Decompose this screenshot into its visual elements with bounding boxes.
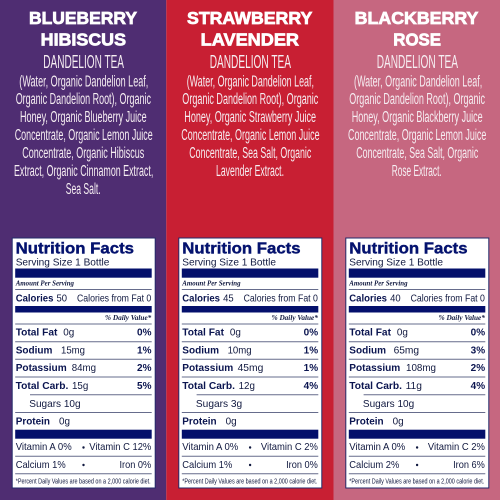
percent daily value label: % Daily Value*: [105, 314, 152, 322]
total fat row: [16, 328, 152, 338]
potassium row: 2%: [137, 363, 152, 374]
ingredients text: [348, 74, 486, 180]
sodium row: 65mg: [394, 346, 419, 356]
calories row: Calories: [182, 294, 220, 304]
protein row: 0g: [226, 416, 237, 428]
total carb row: 4%: [304, 381, 318, 392]
total fat row: Total Fat: [349, 328, 392, 338]
heading: blackberry rose: BLACKBERRY: [355, 8, 479, 28]
total carb row: 5%: [137, 381, 152, 392]
sodium row: [349, 346, 485, 356]
calories row: 45: [223, 294, 234, 304]
ingredients text: Extract, Organic Cinnamon Extract,: [14, 163, 153, 180]
potassium row: 2%: [471, 363, 485, 374]
percent daily value label: % Daily Value*: [272, 314, 318, 322]
sodium row: 1%: [137, 346, 152, 356]
minerals row: Iron 6%: [453, 460, 485, 471]
nutrition title: Nutrition Facts: [349, 241, 468, 258]
minerals row: [182, 460, 318, 471]
serving size: Serving Size 1 Bottle: [349, 258, 443, 268]
ingredients text: [181, 74, 320, 180]
vitamins row: Vitamin C 12%: [89, 442, 151, 453]
total fat row: 0%: [471, 328, 485, 338]
ingredients text: Concentrate, Organic Lemon Juice: [15, 127, 153, 144]
sodium row: [182, 346, 318, 356]
footnote: *Percent Daily Values are based on a 2,000 calorie diet.: [16, 478, 151, 486]
vitamins row: Vitamin C 2%: [428, 442, 485, 453]
ingredients text: Concentrate, Organic Hibiscus: [22, 145, 144, 162]
minerals row: [16, 460, 151, 471]
sodium row: 3%: [471, 346, 485, 356]
subheading: dandelion tea: DANDELION TEA: [43, 51, 124, 72]
panel: blueberry hibiscus: [0, 0, 166, 500]
amount per serving: Amount Per Serving: [348, 280, 408, 288]
calories row: 40: [390, 294, 401, 304]
calories row: Calories from Fat 0: [77, 294, 151, 304]
protein row: Protein: [349, 416, 384, 428]
nutrition facts: strawberry lavender: [179, 238, 322, 488]
ingredients text: Organic Dandelion Root), Organic: [16, 91, 151, 108]
heading: strawberry lavender: STRAWBERRY: [187, 8, 313, 28]
potassium row: 84mg: [72, 363, 96, 374]
total fat row: [349, 328, 485, 338]
ingredients text: Honey, Organic Blueberry Juice: [20, 109, 147, 126]
total carb row: Total Carb.: [16, 381, 69, 392]
potassium row: 45mg: [238, 363, 264, 374]
calories row: [349, 294, 485, 304]
nutrition facts: blackberry rose: [346, 238, 489, 488]
vitamins row: Vitamin C 2%: [261, 442, 318, 453]
nutrition title: Nutrition Facts: [182, 241, 301, 258]
sugars row: Sugars 10g: [363, 399, 414, 410]
potassium row: Potassium: [16, 363, 67, 374]
ingredients text: Organic Dandelion Root), Organic: [182, 91, 318, 108]
percent daily value label: % Daily Value*: [439, 314, 485, 322]
ingredients text: Sea Salt.: [66, 181, 101, 198]
heading: blackberry rose: ROSE: [393, 30, 441, 50]
total fat row: 0%: [304, 328, 318, 338]
minerals row: Calcium 2%: [349, 460, 399, 471]
panel: strawberry lavender: [166, 0, 334, 500]
sodium row: Sodium: [16, 346, 52, 356]
vitamins row: [16, 442, 151, 453]
protein row: Protein: [182, 416, 217, 428]
sodium row: Sodium: [349, 346, 386, 356]
potassium row: [349, 363, 485, 374]
panel: blackberry rose: [334, 0, 500, 500]
sugars row: Sugars 3g: [196, 399, 242, 410]
total carb row: [349, 381, 485, 392]
nutrition title: Nutrition Facts: [16, 241, 134, 258]
nutrition facts: blueberry hibiscus: [12, 238, 155, 488]
total fat row: 0g: [63, 328, 75, 338]
total carb row: Total Carb.: [182, 381, 235, 392]
calories row: Calories: [349, 294, 387, 304]
protein row: Protein: [16, 416, 50, 428]
ingredients text: Lavender Extract.: [216, 163, 284, 180]
total fat row: 0%: [137, 328, 152, 338]
footnote: *Percent Daily Values are based on a 2,000 calorie diet.: [182, 478, 317, 486]
total fat row: 0g: [397, 328, 408, 338]
amount per serving: Amount Per Serving: [15, 280, 74, 288]
calories row: Calories from Fat 0: [244, 294, 318, 304]
minerals row: Calcium 1%: [16, 460, 66, 471]
ingredients text: Rose Extract.: [392, 163, 442, 180]
total carb row: 11g: [406, 381, 422, 392]
calories row: Calories from Fat 0: [411, 294, 485, 304]
total fat row: [182, 328, 318, 338]
potassium row: [182, 363, 318, 374]
vitamins row: Vitamin A 0%: [16, 442, 72, 453]
ingredients text: Concentrate, Sea Salt, Organic: [189, 145, 311, 162]
protein row: 0g: [393, 416, 404, 428]
minerals row: Iron 0%: [120, 460, 151, 471]
heading: strawberry lavender: [187, 8, 313, 50]
ingredients text: Honey, Organic Strawberry Juice: [184, 109, 316, 126]
total fat row: Total Fat: [16, 328, 58, 338]
total fat row: Total Fat: [182, 328, 225, 338]
sodium row: [16, 346, 152, 356]
total carb row: 12g: [239, 381, 255, 392]
heading: strawberry lavender: LAVENDER: [201, 30, 299, 50]
heading: blueberry hibiscus: BLUEBERRY: [29, 8, 137, 28]
protein row: [182, 416, 237, 428]
vitamins row: [349, 442, 485, 453]
vitamins row: [182, 442, 318, 453]
potassium row: 1%: [304, 363, 318, 374]
sugars row: Sugars 10g: [29, 399, 81, 410]
serving size: Serving Size 1 Bottle: [16, 258, 110, 268]
potassium row: [16, 363, 152, 374]
ingredients text: Concentrate, Organic Lemon Juice: [181, 127, 320, 144]
subheading: dandelion tea: DANDELION TEA: [210, 51, 291, 72]
protein row: [349, 416, 404, 428]
ingredients text: [14, 74, 153, 198]
total carb row: [182, 381, 318, 392]
vitamins row: Vitamin A 0%: [182, 442, 238, 453]
sodium row: 1%: [304, 346, 318, 356]
ingredients text: (Water, Organic Dandelion Leaf,: [187, 74, 314, 90]
heading: blackberry rose: [355, 8, 479, 50]
vitamins row: Vitamin A 0%: [349, 442, 405, 453]
total carb row: Total Carb.: [349, 381, 402, 392]
calories row: [16, 294, 151, 304]
protein row: [16, 416, 70, 428]
total carb row: 4%: [471, 381, 485, 392]
potassium row: Potassium: [349, 363, 400, 374]
potassium row: 108mg: [406, 363, 436, 374]
sodium row: 10mg: [228, 346, 252, 356]
heading: blueberry hibiscus: HIBISCUS: [41, 30, 126, 50]
amount per serving: Amount Per Serving: [181, 280, 241, 288]
minerals row: Iron 0%: [286, 460, 318, 471]
total carb row: [16, 381, 152, 392]
minerals row: [349, 460, 485, 471]
calories row: 50: [56, 294, 67, 304]
ingredients text: (Water, Organic Dandelion Leaf,: [19, 74, 148, 90]
sodium row: 15mg: [61, 346, 85, 356]
serving size: Serving Size 1 Bottle: [182, 258, 276, 268]
sodium row: Sodium: [182, 346, 219, 356]
calories row: [182, 294, 318, 304]
minerals row: Calcium 1%: [182, 460, 232, 471]
total carb row: 15g: [72, 381, 89, 392]
potassium row: Potassium: [182, 363, 233, 374]
heading: blueberry hibiscus: [29, 8, 137, 50]
protein row: 0g: [59, 416, 70, 428]
calories row: Calories: [16, 294, 54, 304]
total fat row: 0g: [230, 328, 241, 338]
